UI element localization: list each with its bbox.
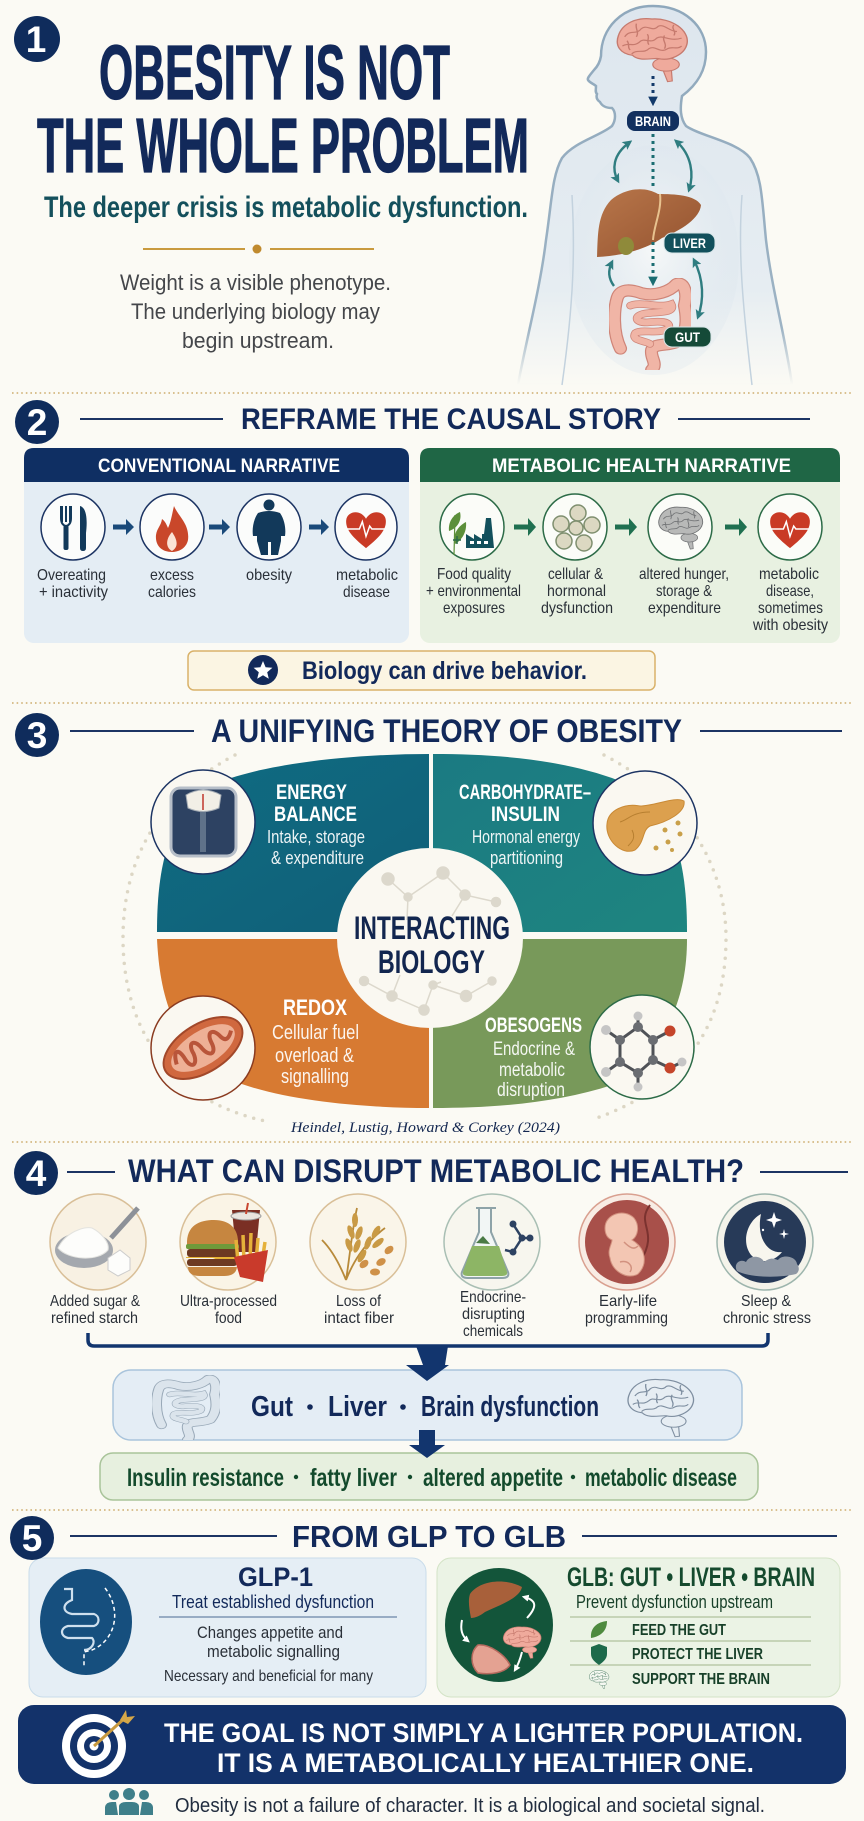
body silhouette <box>518 6 792 385</box>
panel: metabolic health narrative <box>420 448 840 643</box>
gold divider <box>143 244 374 254</box>
step labels <box>37 567 398 601</box>
arrow brain down <box>652 76 654 103</box>
center circle: interacting biology: INTERACTING <box>354 910 510 946</box>
icon: heart <box>335 494 397 560</box>
step labels: storage & <box>656 583 712 600</box>
box: outcomes <box>100 1453 758 1500</box>
panel: GLB: Prevent dysfunction upstream <box>576 1592 773 1612</box>
badge 4: 4 <box>26 1153 47 1194</box>
section 2: reframe <box>15 400 840 690</box>
quadrant: carbohydrate-insulin: CARBOHYDRATE– <box>459 781 591 804</box>
icon: gut <box>157 1379 216 1440</box>
item labels: food <box>215 1310 242 1327</box>
arrow: box to outcomes <box>409 1430 445 1458</box>
item labels: chronic stress <box>723 1310 811 1327</box>
body illustration <box>518 6 792 385</box>
list <box>632 1622 770 1688</box>
teal arrow lower right <box>694 260 702 317</box>
arrows <box>113 519 329 535</box>
quadrant: energy balance: ENERGY <box>276 781 347 804</box>
icon: brain <box>628 1379 694 1437</box>
icon: shield <box>591 1644 607 1665</box>
icon: embryo <box>579 1194 675 1290</box>
icon: flask <box>444 1194 540 1290</box>
list: FEED THE GUT <box>632 1622 726 1639</box>
badge 2: 2 <box>27 402 47 443</box>
liver <box>597 189 701 257</box>
step labels: sometimes <box>758 600 823 617</box>
item labels: programming <box>585 1310 668 1327</box>
quadrant: obesogens: disruption <box>497 1080 565 1101</box>
label: Gut <box>251 1391 293 1423</box>
icon: wheat <box>310 1194 406 1290</box>
label <box>251 1391 599 1423</box>
subtitle: The deeper crisis is metabolic dysfunction. <box>44 191 528 224</box>
title <box>37 30 529 189</box>
panel: GLP-1: Necessary and beneficial for many <box>164 1668 373 1685</box>
panel: GLP-1: Changes appetite and <box>197 1623 343 1642</box>
icon: sugar <box>50 1194 146 1290</box>
icon: intestine in circle <box>40 1569 132 1675</box>
intro text: begin upstream. <box>182 328 334 353</box>
icon: brain <box>648 494 712 560</box>
badge 5: 5 <box>22 1518 42 1559</box>
step labels: cellular & <box>548 566 603 583</box>
quadrant: redox: Cellular fuel <box>272 1022 359 1044</box>
teal arrow lower left <box>609 262 614 286</box>
icon: mitochondrion <box>151 996 255 1100</box>
intro text: The underlying biology may <box>131 299 380 324</box>
quadrant: energy balance: BALANCE <box>274 803 357 826</box>
center circle: interacting biology: BIOLOGY <box>378 944 485 980</box>
quadrant: energy balance: Intake, storage <box>267 827 365 847</box>
quadrant: redox: signalling <box>281 1066 349 1088</box>
badge 3 <box>15 713 59 757</box>
step labels: expenditure <box>648 600 721 617</box>
item labels: disrupting <box>462 1306 525 1323</box>
quadrant: energy balance <box>157 754 429 932</box>
quadrant: carbohydrate-insulin: partitioning <box>490 848 563 868</box>
panel: conventional narrative <box>24 448 409 643</box>
label: GLP-1 <box>238 1562 313 1592</box>
step labels: dysfunction <box>541 600 613 617</box>
section 5: from GLP to GLB <box>10 1516 846 1817</box>
badge 4 <box>14 1151 58 1195</box>
liver label <box>664 233 715 253</box>
step labels: obesity <box>246 567 292 584</box>
header: CONVENTIONAL NARRATIVE <box>98 456 340 477</box>
gut label <box>664 327 711 347</box>
label: Brain dysfunction <box>421 1391 599 1423</box>
brain <box>617 19 687 82</box>
gut label: GUT <box>675 329 700 345</box>
icon: leaf <box>591 1621 607 1638</box>
quadrant: obesogens <box>433 939 687 1108</box>
callout <box>188 651 655 690</box>
icon: pancreas <box>593 771 697 875</box>
banner: THE GOAL IS NOT SIMPLY A LIGHTER POPULATION. <box>164 1718 803 1748</box>
header <box>420 448 840 482</box>
item labels: Sleep & <box>741 1293 791 1310</box>
icon: brain <box>589 1670 609 1689</box>
step labels: excess <box>150 567 194 584</box>
box: gut liver brain dysfunction <box>113 1370 742 1440</box>
step labels: exposures <box>443 600 505 617</box>
box: outcomes: Insulin resistance <box>127 1464 284 1492</box>
box: outcomes: altered appetite <box>423 1464 563 1492</box>
step labels: metabolic <box>759 566 819 583</box>
arrows <box>514 518 747 536</box>
item labels: Ultra-processed <box>180 1293 277 1310</box>
panel: GLP-1 <box>29 1558 426 1697</box>
step labels: altered hunger, <box>639 566 729 583</box>
heading: FROM GLP TO GLB <box>292 1519 566 1554</box>
quadrant: redox: overload & <box>275 1045 355 1067</box>
item labels <box>50 1289 811 1340</box>
item labels: chemicals <box>463 1323 523 1340</box>
step labels: + inactivity <box>39 584 108 601</box>
dotted orbit <box>123 755 726 1121</box>
icon: cells <box>543 494 607 560</box>
badge 3: 3 <box>27 715 47 756</box>
badge 5 <box>10 1516 54 1560</box>
bracket <box>88 1333 768 1346</box>
item labels: Added sugar & <box>50 1293 140 1310</box>
step labels: hormonal <box>547 583 606 600</box>
panel: GLP-1: metabolic signalling <box>207 1642 340 1661</box>
icon: flame <box>140 494 204 560</box>
step labels: Food quality <box>437 566 511 583</box>
badge 2 <box>15 400 59 444</box>
step labels <box>426 566 828 634</box>
icon: moon and clouds <box>717 1194 813 1290</box>
gut <box>615 284 686 370</box>
item labels: Early-life <box>599 1293 657 1310</box>
dotted axis <box>652 134 654 188</box>
brain label <box>627 111 679 131</box>
list: PROTECT THE LIVER <box>632 1646 763 1663</box>
panel: GLP-1: Treat established dysfunction <box>172 1592 374 1612</box>
quadrant: obesogens: metabolic <box>499 1060 565 1081</box>
step labels: with obesity <box>752 617 828 634</box>
step labels: + environmental <box>426 583 521 600</box>
list: SUPPORT THE BRAIN <box>632 1671 770 1688</box>
step labels: metabolic <box>336 567 398 584</box>
icon: burger and fries <box>180 1194 276 1290</box>
icon: star <box>248 655 278 685</box>
icon: scale <box>151 770 255 874</box>
quadrant: obesogens: OBESOGENS <box>485 1014 582 1037</box>
step labels: Overeating <box>37 567 106 584</box>
quadrant: energy balance: & expenditure <box>271 848 364 868</box>
icon: heart <box>758 494 822 560</box>
liver label: LIVER <box>673 235 706 251</box>
quadrant: redox: REDOX <box>283 995 347 1020</box>
quadrant: carbohydrate-insulin: INSULIN <box>491 803 560 826</box>
item labels: refined starch <box>51 1310 138 1327</box>
icon: fork and knife <box>41 494 105 560</box>
arrow: bracket to box <box>406 1346 449 1381</box>
dotted axis lower <box>652 242 654 283</box>
section 1: hero <box>14 6 792 385</box>
intro text: Weight is a visible phenotype. <box>120 270 391 295</box>
teal arrow left <box>614 142 630 181</box>
step labels: disease <box>343 584 390 601</box>
center circle: interacting biology <box>337 848 523 1028</box>
badge 1: 1 <box>26 19 46 60</box>
item labels: intact fiber <box>324 1310 395 1327</box>
callout: Biology can drive behavior. <box>302 657 587 685</box>
section 3: unifying theory <box>15 713 842 1136</box>
teal arrow right <box>676 141 691 190</box>
step labels: disease, <box>766 583 814 600</box>
quadrant: redox <box>157 939 429 1108</box>
banner <box>18 1705 846 1784</box>
step labels: calories <box>148 584 196 601</box>
heading: REFRAME THE CAUSAL STORY <box>241 403 661 436</box>
citation: Heindel, Lustig, Howard & Corkey (2024) <box>290 1120 560 1136</box>
section 4: what can disrupt <box>14 1151 848 1500</box>
title: OBESITY IS NOT <box>99 30 450 116</box>
icon: molecule <box>590 995 694 1099</box>
icon: organ cycle <box>445 1568 553 1682</box>
badge 1 <box>14 16 60 62</box>
panel: GLB <box>437 1558 840 1697</box>
label: Liver <box>328 1391 387 1423</box>
icon: target <box>62 1710 135 1778</box>
header: METABOLIC HEALTH NARRATIVE <box>492 456 791 477</box>
heading: WHAT CAN DISRUPT METABOLIC HEALTH? <box>128 1153 744 1189</box>
intro text <box>120 270 391 353</box>
icon: food and factory <box>440 494 504 560</box>
box: outcomes: metabolic disease <box>585 1464 737 1492</box>
icon: people <box>105 1788 153 1815</box>
quadrant: obesogens: Endocrine & <box>493 1039 575 1060</box>
item labels: Endocrine- <box>460 1289 526 1306</box>
icon: person <box>237 494 301 560</box>
header <box>24 448 409 482</box>
quadrant: carbohydrate-insulin <box>433 754 687 932</box>
heading: A UNIFYING THEORY OF OBESITY <box>211 713 682 749</box>
item labels: Loss of <box>336 1293 381 1310</box>
closing text: Obesity is not a failure of character. It is a biological and societal signal. <box>175 1795 765 1817</box>
brain label: BRAIN <box>635 113 671 129</box>
quadrant: carbohydrate-insulin: Hormonal energy <box>472 827 580 847</box>
banner: IT IS A METABOLICALLY HEALTHIER ONE. <box>217 1748 754 1778</box>
box: outcomes: fatty liver <box>310 1464 397 1492</box>
